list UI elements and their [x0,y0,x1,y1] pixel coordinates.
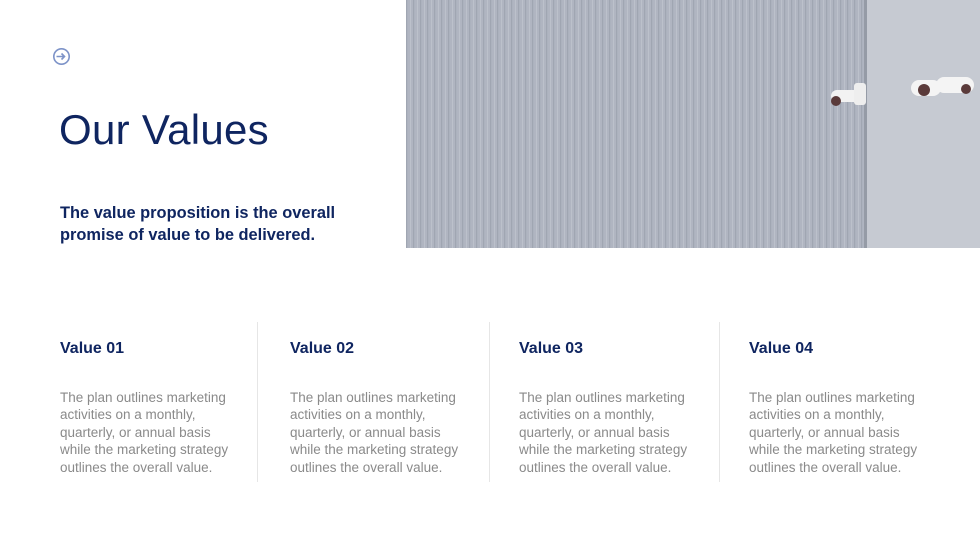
column: Value 04: quarterly, or annual basis [749,425,900,440]
subtitle: The value proposition is the overall [60,204,335,222]
column: Value 03: Value 03 [519,340,583,357]
column: Value 03: while the marketing strategy [519,442,687,457]
title: Our Values [59,106,269,153]
column: Value 01: outlines the overall value. [60,460,212,475]
column: Value 01: The plan outlines marketing [60,390,226,405]
icon: arrow in circle [53,48,70,65]
column: Value 03 [519,340,687,475]
column: Value 03: quarterly, or annual basis [519,425,670,440]
column: Value 02 [290,340,458,475]
subtitle [60,204,335,244]
column: Value 02: outlines the overall value. [290,460,442,475]
column: Value 04 [749,340,917,475]
column: Value 01: Value 01 [60,340,124,357]
cameras [831,77,974,106]
column: Value 02: Value 02 [290,340,354,357]
column: Value 02: The plan outlines marketing [290,390,456,405]
column: Value 04: activities on a monthly, [749,407,885,422]
column: Value 01: quarterly, or annual basis [60,425,211,440]
column: Value 03: activities on a monthly, [519,407,655,422]
column: Value 01: activities on a monthly, [60,407,196,422]
column: Value 02: while the marketing strategy [290,442,458,457]
subtitle: promise of value to be delivered. [60,226,315,244]
column: Value 04: The plan outlines marketing [749,390,915,405]
column: Value 04: Value 04 [749,340,813,357]
column: Value 04: outlines the overall value. [749,460,901,475]
column: Value 02: activities on a monthly, [290,407,426,422]
column: Value 01: while the marketing strategy [60,442,228,457]
column: Value 01 [60,340,228,475]
photo: wall with cameras [406,0,980,248]
column: Value 03: outlines the overall value. [519,460,671,475]
column: Value 03: The plan outlines marketing [519,390,685,405]
column: Value 02: quarterly, or annual basis [290,425,441,440]
column: Value 04: while the marketing strategy [749,442,917,457]
